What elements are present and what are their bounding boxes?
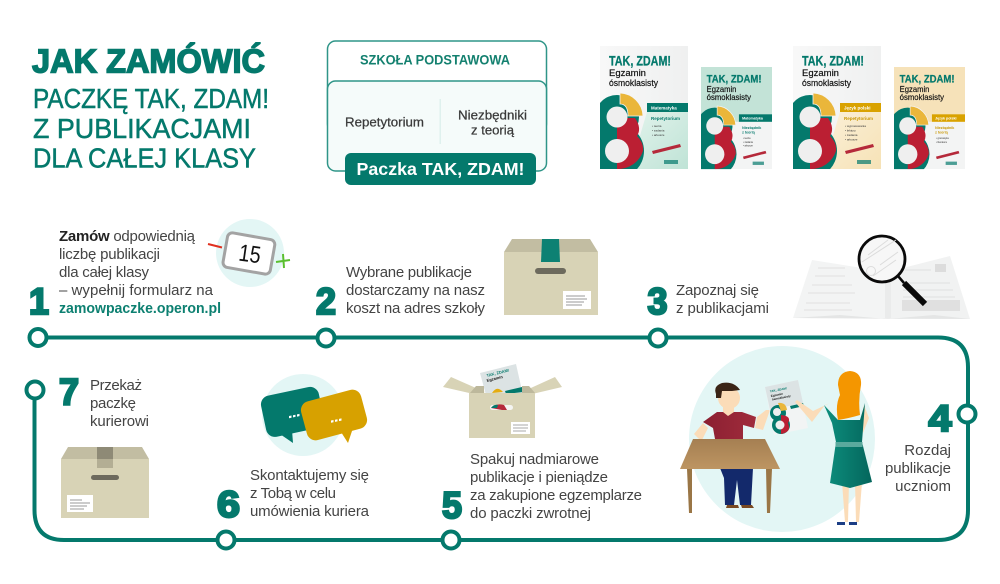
node 2 — [318, 330, 334, 346]
number 1: 1 — [29, 281, 49, 322]
step 4 text: Rozdaj — [904, 442, 951, 459]
book cover: jezyk polski repetytorium: Egzamin — [802, 68, 839, 79]
handed book: ósmoklasisty — [772, 394, 791, 401]
book cover: jezyk polski repetytorium: Repetytorium — [844, 116, 873, 121]
step 1 text — [59, 228, 221, 317]
book cover: jezyk polski repetytorium: • zadania — [845, 133, 858, 137]
book cover: jezyk polski niezbedniki: TAK, ZDAM! — [900, 73, 955, 85]
icon: chat bubbles — [259, 374, 369, 456]
step 2 text — [346, 264, 486, 317]
book cover: matematyka repetytorium: Repetytorium — [651, 116, 680, 121]
book cover: jezyk polski repetytorium: TAK, ZDAM! — [802, 54, 864, 68]
title — [32, 42, 269, 174]
step 5 text: do paczki zwrotnej — [470, 505, 591, 522]
step 1 — [29, 219, 290, 346]
book cover: jezyk polski repetytorium: • lektury — [845, 128, 856, 132]
icon: open box with book: Egzamin — [486, 374, 504, 383]
icon: closed box — [61, 447, 149, 518]
book cover: matematyka repetytorium — [600, 46, 688, 169]
number 6: 6 — [217, 484, 240, 525]
table — [680, 439, 780, 513]
book cover: matematyka repetytorium: • teoria — [652, 124, 662, 128]
step 1 text: liczbę publikacji — [59, 246, 160, 263]
step 1 text: – wypełnij formularz na — [59, 282, 214, 299]
label: repetytorium: Repetytorium — [345, 114, 424, 130]
step 4 — [680, 346, 976, 532]
step 7 text — [90, 377, 149, 430]
label: niezbedniki: z teorią — [471, 122, 515, 138]
number 7: 7 — [59, 372, 79, 412]
step 6 text: umówienia kuriera — [250, 503, 370, 520]
number 4: 4 — [928, 398, 952, 439]
step 3 text: z publikacjami — [676, 300, 769, 317]
book cover: matematyka repetytorium: TAK, ZDAM! — [609, 54, 671, 68]
step 5 — [442, 364, 642, 548]
step 1 text: dla całej klasy — [59, 264, 150, 281]
book cover: matematyka repetytorium: • zadania — [652, 128, 665, 132]
step 6 text: z Tobą w celu — [250, 485, 336, 502]
book cover: jezyk polski niezbedniki — [894, 67, 965, 170]
step 3 text: Zapoznaj się — [676, 282, 759, 299]
timeline path — [34, 338, 968, 540]
node 7 — [26, 382, 44, 398]
book cover: matematyka niezbedniki: ósmoklasisty — [707, 93, 751, 102]
step 5 text: za zakupione egzemplarze — [470, 487, 642, 504]
handed book — [765, 380, 808, 435]
step 3 text — [676, 282, 769, 317]
step 2 text: dostarczamy na nasz — [346, 282, 485, 299]
step 2 text: koszt na adres szkoły — [346, 300, 486, 317]
label: niezbedniki — [458, 108, 527, 138]
teacher — [795, 371, 872, 525]
step 2 text: Wybrane publikacje — [346, 264, 472, 281]
step 6 text: Skontaktujemy się — [250, 467, 369, 484]
step 7 text: kurierowi — [90, 413, 149, 430]
book cover: jezyk polski niezbedniki: • literatura — [936, 141, 947, 144]
book cover: jezyk polski repetytorium: • arkusze — [845, 138, 858, 142]
heading: school level: SZKOŁA PODSTAWOWA — [360, 52, 510, 68]
icon: open book with magnifier — [793, 236, 970, 319]
step 5 text: Spakuj nadmiarowe — [470, 451, 599, 468]
book cover: jezyk polski repetytorium — [793, 46, 881, 169]
number 3: 3 — [648, 281, 668, 322]
label: niezbedniki: Niezbędniki — [458, 108, 527, 122]
book cover: matematyka niezbedniki — [701, 67, 772, 170]
step 1 text: zamowpaczke.operon.pl — [59, 300, 221, 317]
step 4 text: publikacje — [885, 460, 951, 477]
number 5: 5 — [442, 485, 462, 526]
step 4 text: uczniom — [895, 478, 951, 495]
step 2 — [316, 239, 598, 346]
node 1 — [30, 329, 46, 346]
title: JAK ZAMÓWIĆ — [32, 42, 265, 80]
step 5 text — [470, 451, 642, 522]
button: package: Paczka TAK, ZDAM! — [356, 159, 524, 179]
book cover: matematyka niezbedniki: TAK, ZDAM! — [707, 73, 762, 85]
book cover: jezyk polski niezbedniki: z teorią — [935, 130, 949, 134]
title: DLA CAŁEJ KLASY — [33, 142, 256, 174]
node 4 — [958, 406, 976, 422]
node 5 — [442, 532, 460, 548]
book cover: matematyka repetytorium: • arkusze — [652, 133, 665, 137]
step 6 text — [250, 467, 370, 520]
book cover: matematyka niezbedniki: Matematyka — [742, 117, 764, 121]
title: Z PUBLIKACJAMI — [33, 113, 251, 144]
button: package — [345, 153, 536, 185]
step 1 text: Zamów odpowiednią — [59, 228, 196, 245]
book cover: matematyka repetytorium: Egzamin — [609, 68, 646, 79]
panel: school package — [328, 41, 546, 185]
book cover: jezyk polski niezbedniki: Niezbędnik — [935, 126, 955, 130]
step 4 text — [885, 442, 951, 495]
student — [694, 383, 770, 508]
book cover: matematyka niezbedniki: z teorią — [742, 130, 756, 134]
title: PACZKĘ TAK, ZDAM! — [33, 83, 269, 114]
icon: quantity counter — [208, 219, 290, 287]
step 7 text: Przekaż — [90, 377, 142, 394]
node 6 — [218, 532, 234, 548]
node 3 — [650, 330, 666, 346]
icon: open box with book — [443, 364, 562, 438]
step 3 — [648, 236, 970, 346]
step 5 text: publikacje i pieniądze — [470, 469, 608, 486]
handed book: TAK, ZDAM! — [770, 386, 787, 393]
book cover: jezyk polski niezbedniki: • gramatyka — [936, 137, 949, 140]
step 7 — [26, 372, 149, 518]
icon: quantity counter: 15 — [237, 240, 263, 269]
step 7 text: paczkę — [90, 395, 136, 412]
book cover: jezyk polski niezbedniki: Język polski — [935, 117, 956, 121]
handed book: Egzamin — [770, 392, 783, 398]
book cover: matematyka niezbedniki: • teoria — [743, 137, 751, 140]
book cover: jezyk polski repetytorium: • wypracowania — [845, 124, 866, 128]
book cover: matematyka niezbedniki: Egzamin — [707, 85, 736, 94]
book cover: matematyka niezbedniki: • arkusze — [743, 145, 754, 148]
book cover: jezyk polski repetytorium: ósmoklasisty — [802, 78, 851, 89]
book cover: matematyka repetytorium: ósmoklasisty — [609, 78, 658, 89]
icon: closed box with teal tape — [504, 239, 598, 315]
book cover: jezyk polski niezbedniki: Egzamin — [900, 85, 929, 94]
book cover: jezyk polski repetytorium: Język polski — [844, 106, 871, 110]
book cover: matematyka repetytorium: Matematyka — [651, 106, 677, 110]
book cover: jezyk polski niezbedniki: ósmoklasisty — [900, 93, 944, 102]
book cover: matematyka niezbedniki: • zadania — [743, 141, 754, 144]
step 6 — [217, 374, 370, 548]
icon: open box with book: TAK, ZDAM! — [486, 368, 510, 378]
number 2: 2 — [316, 281, 336, 322]
book cover: matematyka niezbedniki: Niezbędnik — [742, 126, 762, 130]
illustration: teacher hands book to student — [680, 346, 875, 532]
